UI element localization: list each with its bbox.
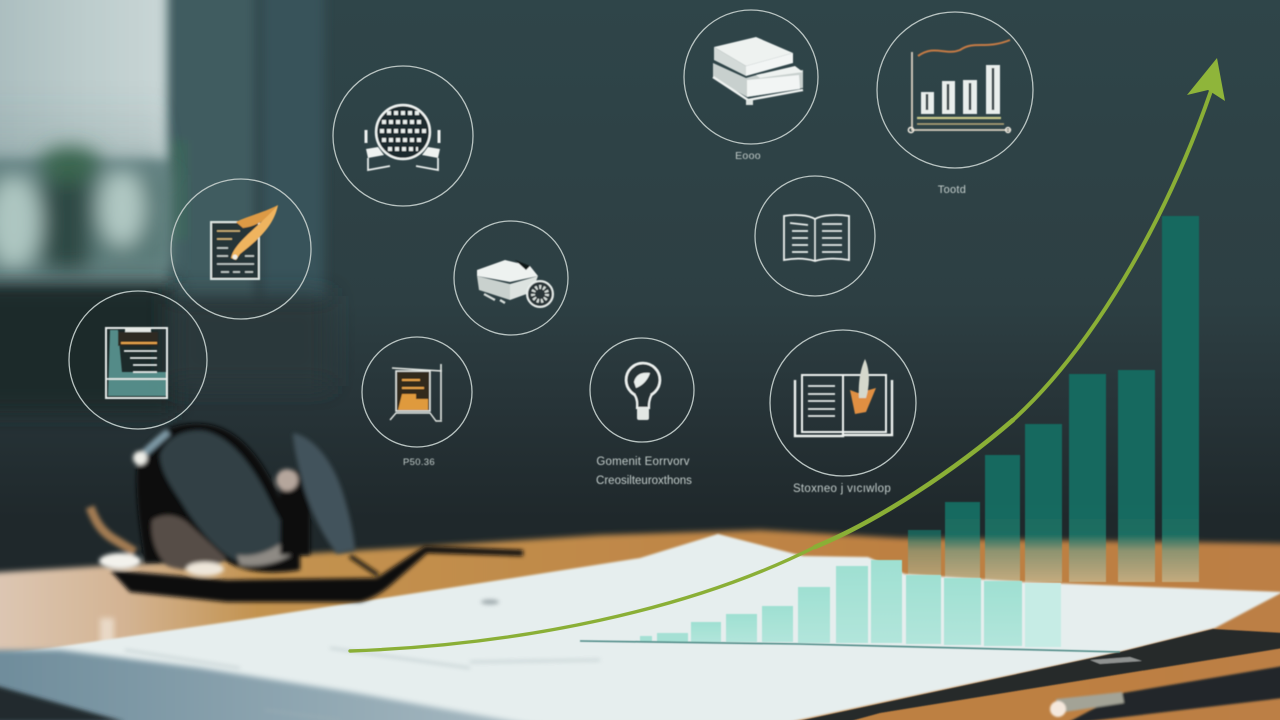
glasses: right lens — [293, 433, 355, 554]
glasses: inner tan reflection — [152, 515, 226, 570]
glasses: white glints — [99, 553, 141, 569]
icon circle: box with coin — [454, 221, 568, 335]
label: P50.36: P50.36 — [403, 457, 435, 468]
icon circle: stacked books — [684, 10, 818, 144]
table top: wood surface — [0, 530, 1280, 720]
label: Tootd: Tootd — [938, 184, 966, 196]
icon circle: orange document on frame — [362, 337, 472, 447]
glasses: bridge hinge — [276, 469, 298, 491]
arrow: middle stretch — [815, 420, 1013, 547]
glasses: left lens — [160, 430, 293, 562]
label: two-line caption under bulb: Gomenit Eorrvorv — [596, 456, 690, 468]
label: Stoxneo j vicwlop: Stoxneo j vıcıwlop — [793, 483, 891, 495]
icon circle: light bulb — [590, 338, 694, 442]
label: two-line caption under bulb: Creosilteuroxthons — [596, 475, 692, 487]
icon circle: globe with hands — [333, 66, 473, 206]
sheet: paper with the light chart — [0, 534, 1280, 720]
sheet: faint printed text lines and smudge — [125, 600, 600, 720]
background: blurred curtains, window and plant — [0, 0, 330, 413]
pen: blurred pen at lower right — [1050, 666, 1280, 720]
glasses: temple highlight — [142, 432, 168, 455]
icon circle: open book with feather — [770, 330, 916, 476]
glasses: bridge — [280, 470, 310, 555]
glasses: frame — [137, 423, 300, 572]
glasses: bottom rim — [110, 546, 523, 602]
chart: teal bars fading over the table — [908, 216, 1199, 582]
icon circle: clipboard — [69, 291, 207, 429]
arrow: upper stretch — [1013, 88, 1212, 420]
glasses: blurred eyeglasses on the table — [90, 423, 523, 602]
folder: dark cover at lower right — [785, 629, 1280, 720]
label: two-line caption under bulb — [596, 456, 692, 487]
folder: dark edge lower left — [0, 684, 125, 720]
arrow head — [1187, 58, 1225, 101]
chart: mint bars on the paper — [580, 560, 1120, 652]
glasses: lens rim — [237, 535, 296, 566]
icon circle: bar chart with line — [877, 12, 1033, 168]
icon circle: open book — [755, 176, 875, 296]
icon circle: document with quill — [171, 179, 311, 319]
arrow: green growth curve — [350, 58, 1225, 651]
label: Eooo: Eooo — [735, 150, 761, 162]
table: reflection — [100, 618, 114, 654]
folder: blue-grey cover at lower left — [0, 650, 560, 720]
folder: highlight — [1090, 657, 1142, 664]
glasses: left arm tip — [90, 507, 135, 552]
